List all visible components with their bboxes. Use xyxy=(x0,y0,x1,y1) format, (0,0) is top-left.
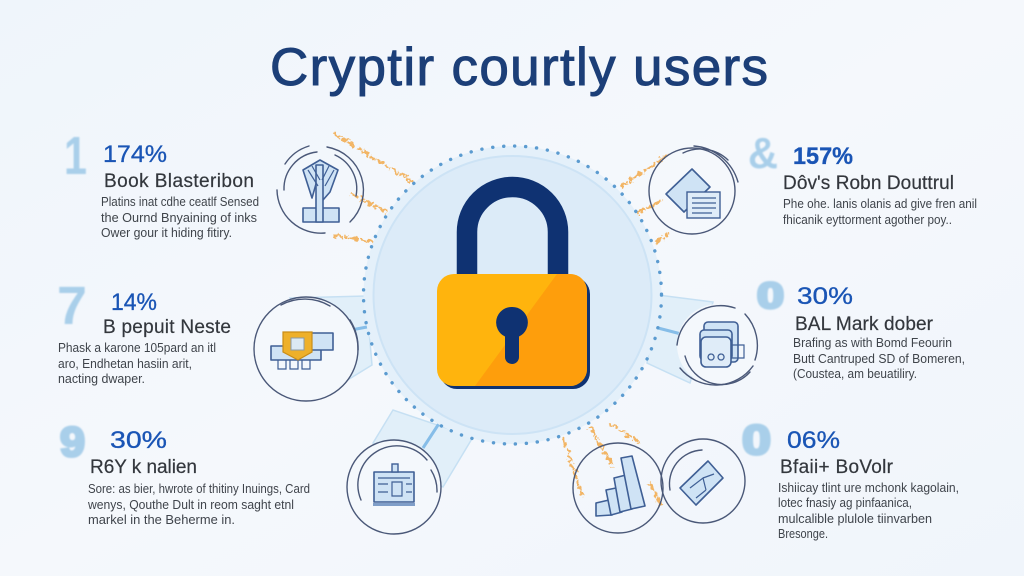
stat: 174% xyxy=(103,141,167,168)
body text: Ower gour it hiding fitiry. xyxy=(101,226,232,240)
body text: Phe ohe. lanis olanis ad give fren anil xyxy=(783,197,977,211)
body text: Brafing as with Bomd Feourin xyxy=(793,336,952,350)
body text xyxy=(783,197,977,227)
stat: 157% xyxy=(793,143,853,170)
body text: the Ournd Bnyaining of inks xyxy=(101,211,257,225)
numeral: & xyxy=(748,129,778,178)
stat: 06% xyxy=(787,427,840,454)
body text: markel in the Beherme in. xyxy=(88,513,235,527)
icon: bar chart xyxy=(573,443,663,533)
numeral: 9 xyxy=(60,418,85,465)
numeral: 0 xyxy=(757,275,784,316)
numeral: 0 xyxy=(742,416,771,463)
icon: server box xyxy=(347,440,441,534)
icon: chip card xyxy=(661,439,745,523)
body text: lotec fnasiy ag pinfaanica, xyxy=(778,496,912,510)
shackle xyxy=(467,187,558,276)
body text xyxy=(793,336,965,381)
body text: aro, Endhetan hasiin arit, xyxy=(58,357,192,371)
heading: R6Y k nalien xyxy=(90,457,197,478)
numeral: 1 xyxy=(64,126,87,186)
heading: Bfaii+ BoVolr xyxy=(780,457,894,478)
body text: Sore: as bier, hwrote of thitiny Inuings, Card xyxy=(88,482,310,496)
body text: fhicanik eyttorment agother poy.. xyxy=(783,213,952,227)
heading: B pepuit Neste xyxy=(103,317,231,338)
lock body xyxy=(437,274,587,386)
body text: Platins inat cdhe ceatlf Sensed xyxy=(101,195,259,209)
central circle xyxy=(364,146,662,444)
body text: nacting dwaper. xyxy=(58,372,145,386)
icon: emblem xyxy=(277,146,363,233)
heading: BAL Mark dober xyxy=(795,314,934,335)
lock body shadow xyxy=(440,277,590,389)
keyhole xyxy=(496,307,528,364)
stat: 30% xyxy=(110,427,167,454)
item 5 xyxy=(757,275,965,381)
stat: 30% xyxy=(797,283,853,310)
body text: Bresonge. xyxy=(778,527,828,541)
body text xyxy=(87,482,310,527)
heading: Book Blasteribon xyxy=(104,171,254,192)
item 2 xyxy=(57,276,231,386)
body text: Butt Cantruped SD of Bomeren, xyxy=(793,352,965,366)
body text: (Coustea, am beuatiliry. xyxy=(793,367,917,381)
item 3 xyxy=(60,418,310,527)
item 1 xyxy=(64,126,259,240)
body text: Phask a karone 105pard an itl xyxy=(58,341,216,355)
body text: Ishiicay tlint ure mchonk kagolain, xyxy=(778,481,959,495)
padlock xyxy=(437,187,590,389)
body text: wenys, Qouthe Dult in reom saght etnl xyxy=(87,498,294,512)
numeral: 7 xyxy=(57,276,87,336)
body text xyxy=(58,341,216,386)
icon: card and document xyxy=(649,146,738,234)
title: Cryptir courtly users xyxy=(270,38,768,97)
item 6 xyxy=(742,416,959,541)
body text xyxy=(101,195,259,240)
icon: database device xyxy=(677,304,759,386)
heading: Dôv's Robn Douttrul xyxy=(783,173,954,194)
orange connectors xyxy=(333,133,670,507)
item 4 xyxy=(748,129,977,227)
icon: shield device xyxy=(254,297,358,401)
body text: mulcalible plulole tiinvarben xyxy=(778,512,932,526)
connector bands xyxy=(290,295,713,487)
body text xyxy=(778,481,959,541)
stat: 14% xyxy=(111,289,157,316)
